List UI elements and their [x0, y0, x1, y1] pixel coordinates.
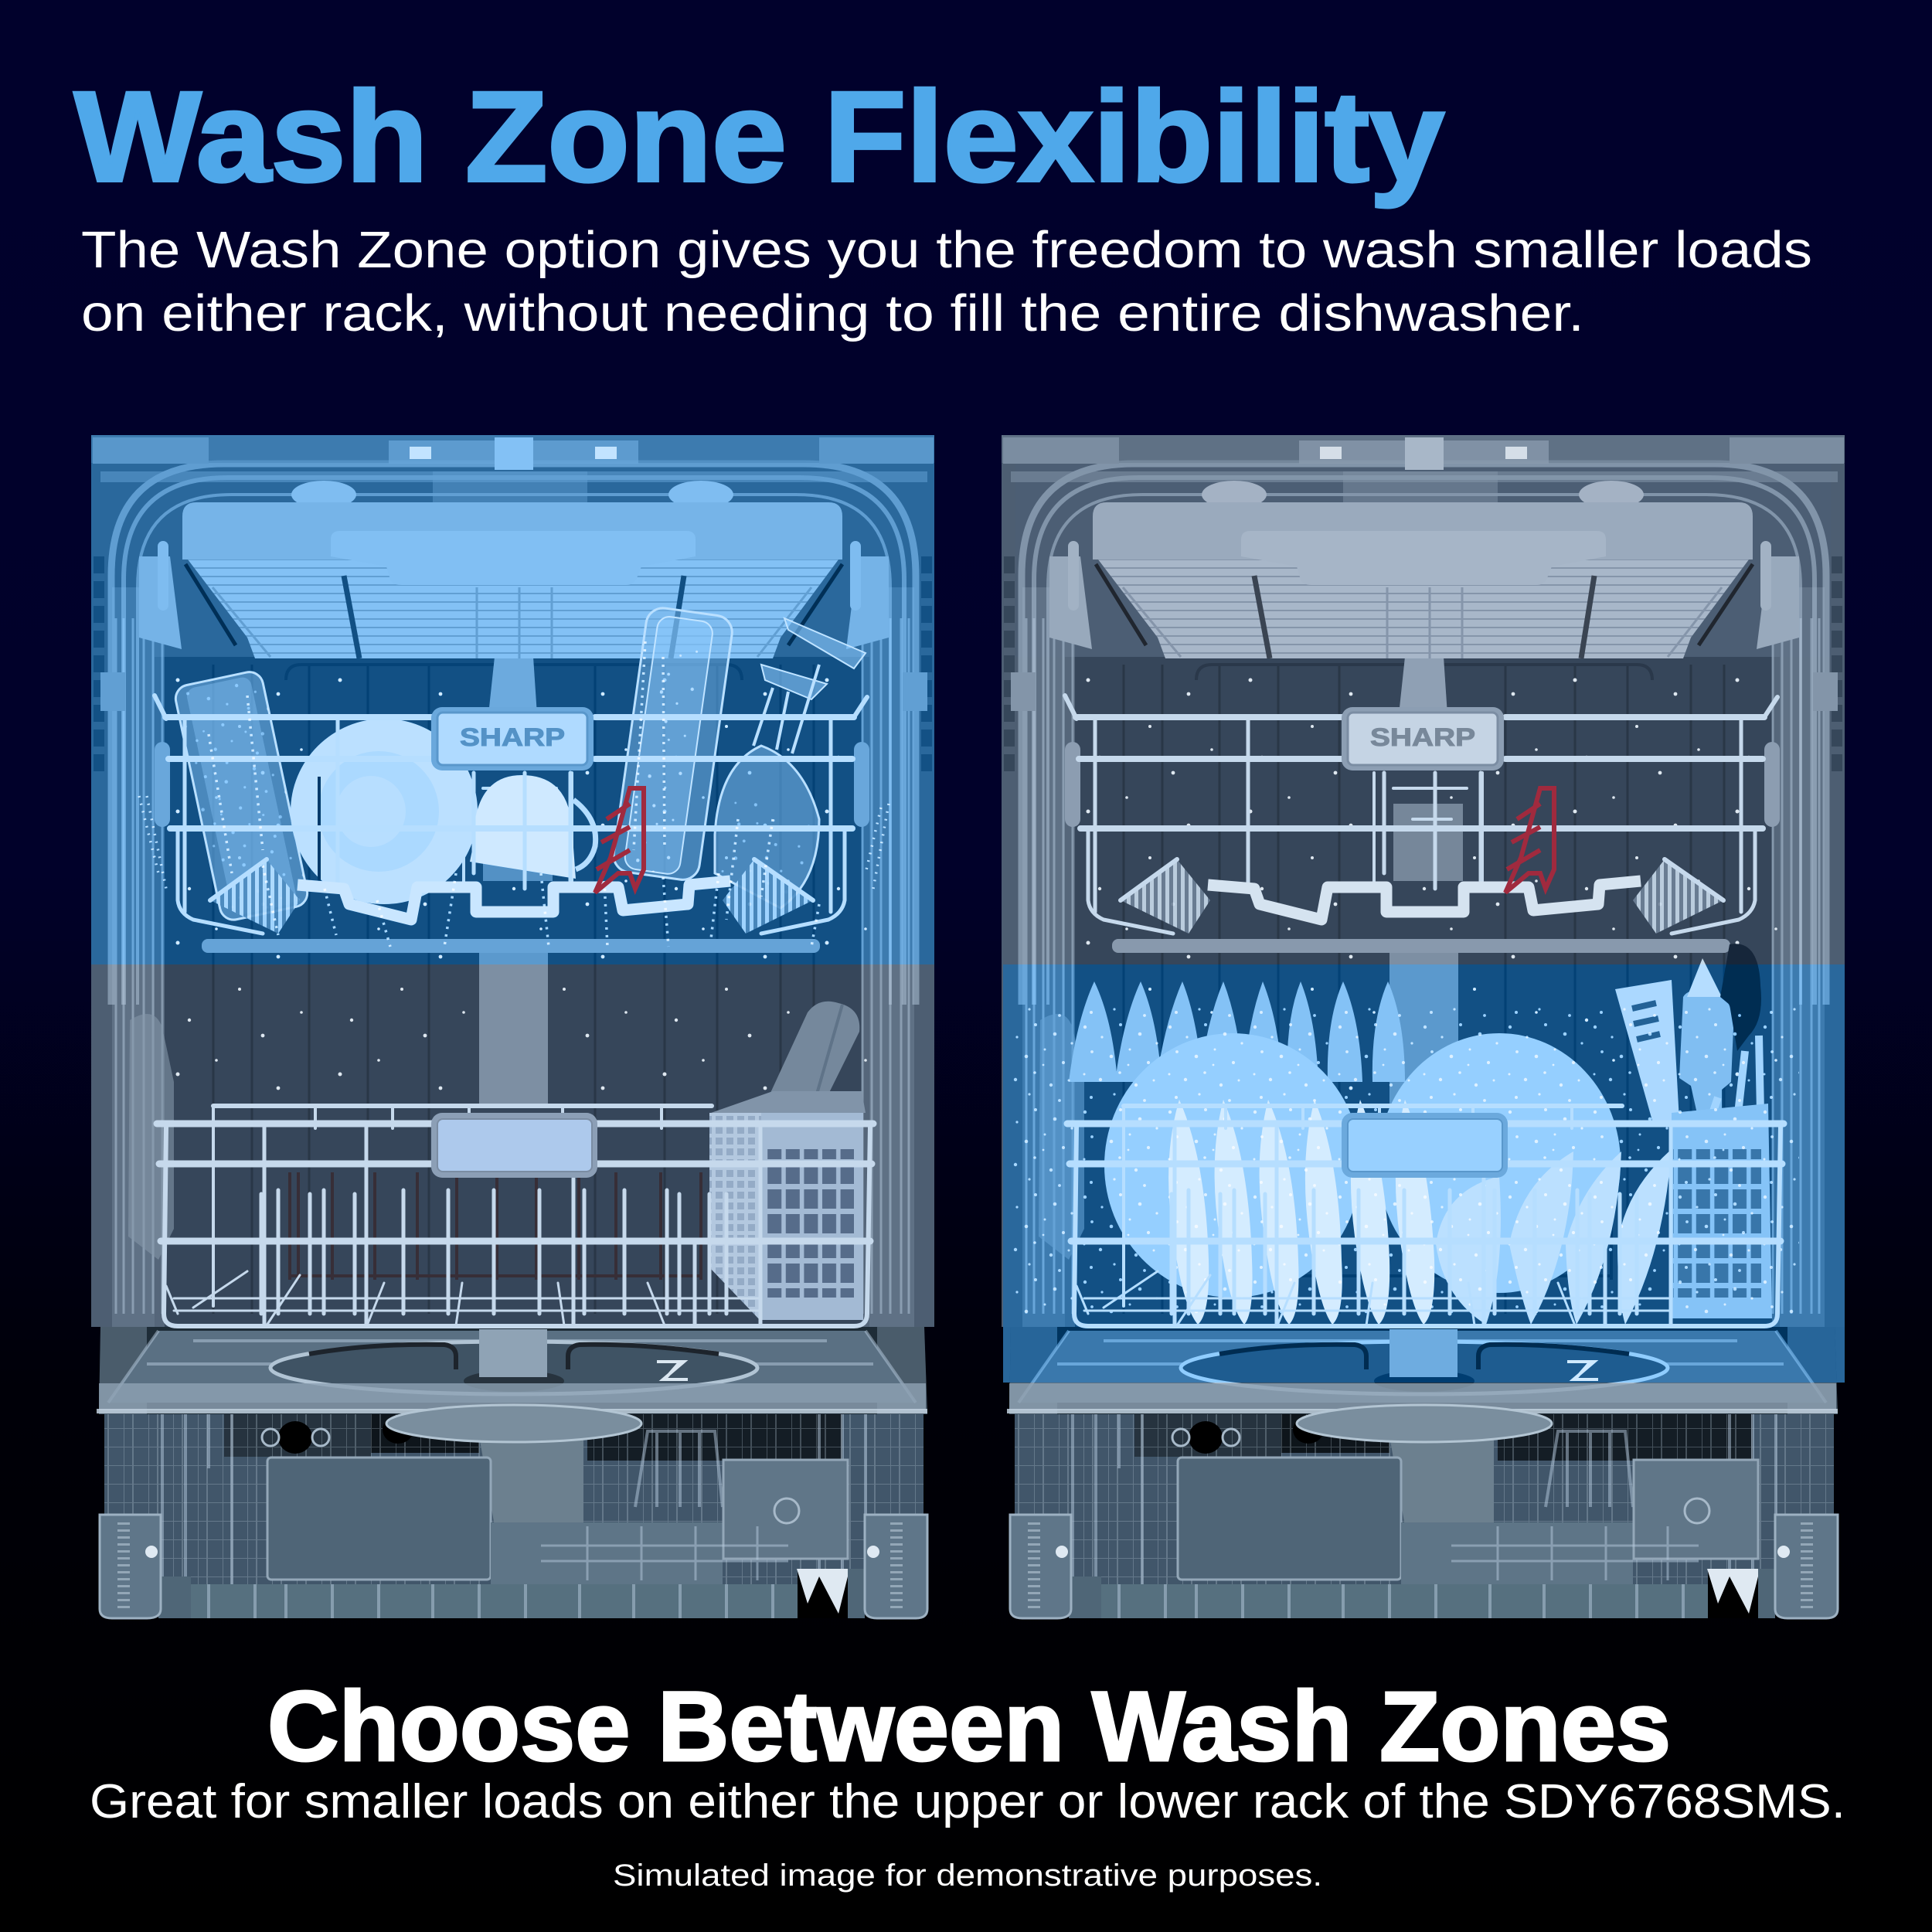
tall glasses [611, 606, 734, 882]
wine glasses [714, 618, 866, 908]
blue zone tint [91, 435, 934, 964]
intro text: The Wash Zone option gives you the freedom to wash smaller loads [81, 221, 1812, 279]
cup [470, 775, 576, 879]
glasses stack [173, 669, 310, 922]
spray droplets [1011, 1005, 1799, 1314]
plate [291, 719, 478, 904]
large plates [1104, 1033, 1361, 1298]
front plates [1168, 1100, 1434, 1325]
intro text [81, 221, 1812, 342]
lower rack utensil arm [711, 1002, 866, 1113]
utensils [1615, 980, 1679, 1121]
rack wires [155, 696, 867, 1325]
blue zone tint [1003, 964, 1845, 1383]
panel: right dishwasher, lower rack zone [1002, 435, 1845, 1618]
back plates [1069, 981, 1405, 1097]
upper rack load: dishes and glasses [173, 606, 866, 922]
red rack part [1505, 788, 1554, 893]
heading: choose between wash zones: Choose Between Wash Zones [267, 1672, 1671, 1782]
rack wires [1065, 696, 1777, 1325]
cutlery basket [1672, 1104, 1772, 1318]
blue band behind base of tub [1003, 1314, 1845, 1383]
dishwasher structure [91, 435, 934, 1618]
title: Wash Zone Flexibility [74, 66, 1444, 209]
intro text: on either rack, without needing to fill the entire dishwasher. [81, 284, 1584, 342]
water streams [139, 641, 889, 947]
red rack part [595, 788, 644, 893]
panel: left dishwasher, upper rack zone [91, 435, 934, 1618]
subheading: Great for smaller loads on either the upper or lower rack of the SDY6768SMS. [90, 1775, 1845, 1828]
disclaimer: Simulated image for demonstrative purposes. [613, 1859, 1322, 1893]
dishwasher structure [1002, 435, 1845, 1618]
lower rack load: plates and utensils [1011, 944, 1799, 1325]
lower cutlery basket [709, 1113, 863, 1321]
